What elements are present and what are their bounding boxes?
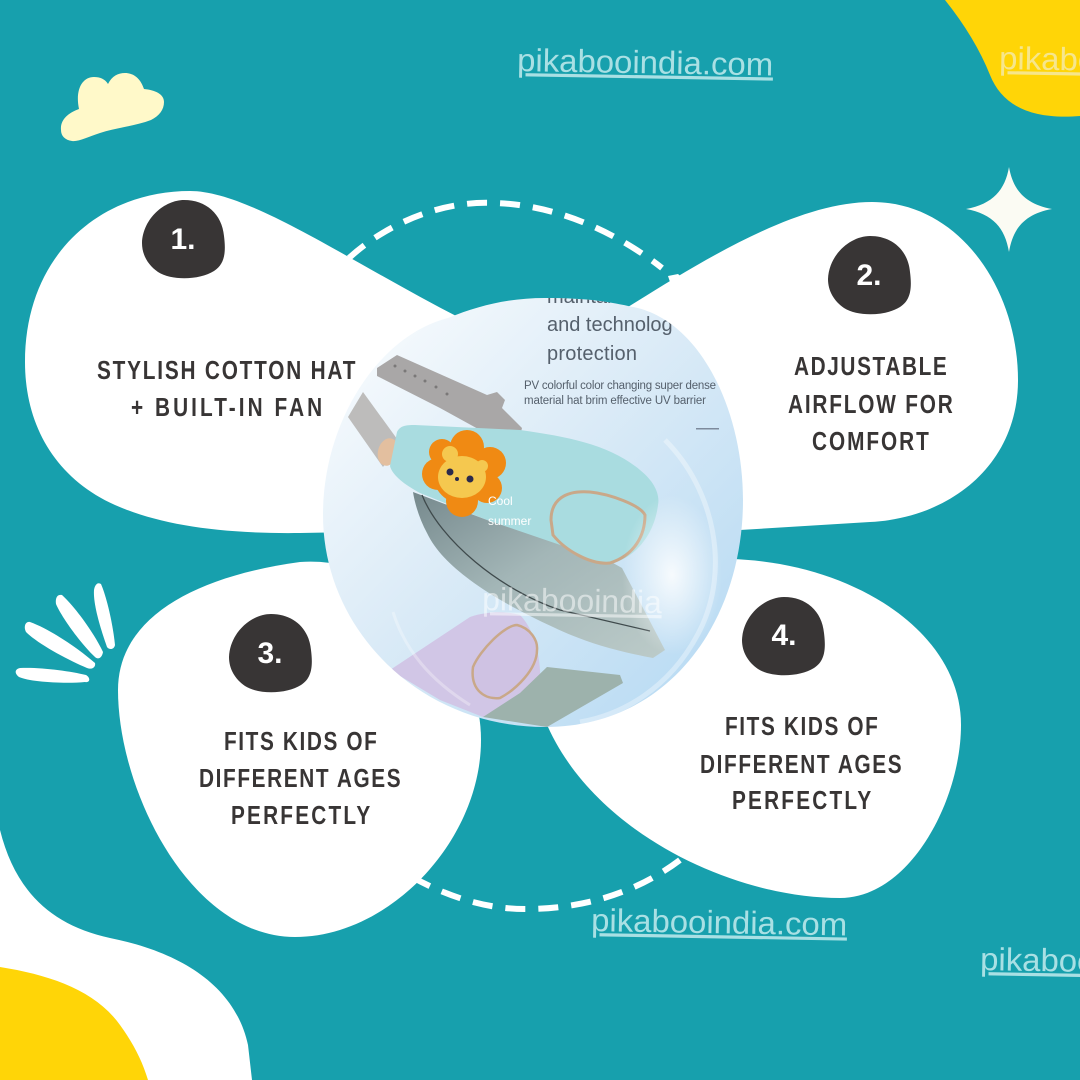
bottom left yellow corner shape — [0, 967, 148, 1080]
hat strap — [348, 355, 522, 468]
panel 2 text: AIRFLOW FOR — [788, 390, 953, 419]
watermark top: pikabooindia.com — [517, 42, 773, 82]
panel 1 number badge: 1. — [170, 223, 196, 256]
panel 3 number badge — [229, 614, 312, 692]
central product image — [320, 286, 750, 730]
caption text in image: material hat brim effective UV barrier — [524, 395, 706, 407]
fan button on visor — [551, 492, 645, 563]
bubble overlay — [393, 440, 722, 722]
panel 2 text — [788, 352, 953, 456]
caption text in image: PV colorful color changing super dense — [524, 380, 716, 392]
dashed arc bottom — [412, 860, 680, 909]
caption text in image — [524, 286, 719, 430]
panel 1 blob — [25, 191, 460, 533]
caption text in image: maintain — [547, 286, 623, 308]
small bumps on panel 2 edge — [668, 264, 712, 295]
panel 1 text: + BUILT-IN FAN — [131, 393, 322, 422]
second hat button — [473, 625, 537, 698]
panel 3 text — [199, 727, 401, 830]
caption text in image: and technolog — [547, 314, 673, 336]
icon: cloud — [61, 73, 164, 141]
panel 3 text: DIFFERENT AGES — [199, 764, 401, 793]
panel 3 number badge: 3. — [257, 637, 283, 670]
watermark bottom: pikabooindia.com — [591, 902, 847, 942]
icon: sparkle star — [966, 167, 1052, 252]
icon: burst rays — [16, 583, 115, 683]
panel 4 — [545, 559, 961, 898]
lion badge — [422, 430, 506, 517]
dashed arc top — [349, 203, 662, 268]
panel 1 text: STYLISH COTTON HAT — [97, 356, 356, 385]
panel 4 blob — [545, 559, 961, 898]
panel 2 number badge — [828, 236, 911, 314]
caption on visor: Cool — [488, 494, 513, 508]
panel 2 blob — [620, 202, 1018, 530]
panel 2 — [620, 202, 1018, 530]
panel 3 text: PERFECTLY — [231, 801, 370, 830]
panel 3 — [118, 562, 481, 937]
panel 3 text: FITS KIDS OF — [224, 727, 377, 756]
panel 1 — [25, 191, 460, 533]
caption on visor: summer — [488, 514, 531, 528]
panel 2 text: COMFORT — [812, 427, 929, 456]
panel 1 number badge — [142, 200, 225, 278]
caption text in image: protection — [547, 343, 637, 365]
panel 2 number badge: 2. — [856, 259, 882, 292]
caption on visor — [488, 496, 532, 525]
panel 4 number badge — [742, 597, 825, 675]
panel 4 text: FITS KIDS OF — [725, 712, 878, 741]
second hat brim — [483, 667, 623, 727]
hat brim — [413, 492, 665, 658]
panel 4 text — [700, 712, 902, 815]
panel 4 text: PERFECTLY — [732, 786, 871, 815]
top right yellow corner shape — [945, 0, 1080, 117]
second hat purple — [390, 612, 540, 717]
hat visor — [390, 425, 658, 563]
panel 1 text — [97, 356, 356, 422]
panel 3 blob — [118, 562, 481, 937]
watermark center: pikabooindia — [482, 581, 662, 620]
panel 4 number badge: 4. — [771, 619, 797, 652]
panel 4 text: DIFFERENT AGES — [700, 750, 902, 779]
bottom left white corner shape — [0, 830, 252, 1080]
panel 2 text: ADJUSTABLE — [794, 352, 947, 381]
